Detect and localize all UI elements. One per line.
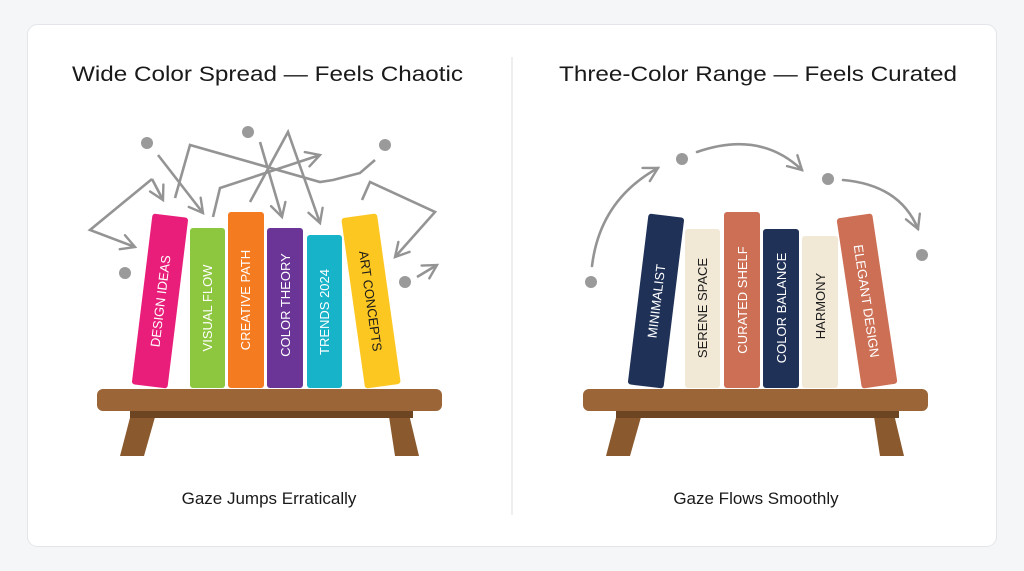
book: Creative Path: CREATIVE PATH xyxy=(238,250,253,350)
book: Art Concepts xyxy=(341,213,401,389)
book: Design Ideas xyxy=(132,213,188,389)
book: Minimalist: MINIMALIST xyxy=(645,263,668,339)
book: Creative Path xyxy=(228,212,264,388)
panel: chaotic shelf xyxy=(90,126,442,456)
title: right: Three-Color Range — Feels Curated xyxy=(559,63,957,86)
book: Harmony xyxy=(802,236,838,388)
book: Harmony: HARMONY xyxy=(813,272,828,339)
caption: right: Gaze Flows Smoothly xyxy=(673,489,839,508)
book: Curated Shelf xyxy=(724,212,760,388)
book: Visual Flow xyxy=(190,228,225,388)
book: Trends 2024: TRENDS 2024 xyxy=(317,269,332,355)
book: Elegant Design xyxy=(836,213,898,389)
book: Curated Shelf: CURATED SHELF xyxy=(735,246,750,354)
arrows: erratic gaze xyxy=(90,126,437,288)
book: Visual Flow: VISUAL FLOW xyxy=(200,264,215,351)
book: Art Concepts: ART CONCEPTS xyxy=(356,250,385,353)
arrows: smooth gaze xyxy=(585,144,928,288)
title: left: Wide Color Spread — Feels Chaotic xyxy=(72,63,463,86)
shelf: left xyxy=(97,389,442,456)
book: Trends 2024 xyxy=(307,235,342,388)
book: Serene Space xyxy=(685,229,720,388)
book: Color Balance: COLOR BALANCE xyxy=(774,252,789,363)
book: Color Theory: COLOR THEORY xyxy=(278,253,293,357)
book: Color Theory xyxy=(267,228,303,388)
book: Elegant Design: ELEGANT DESIGN xyxy=(851,244,882,359)
book: Color Balance xyxy=(763,229,799,388)
book: Minimalist xyxy=(628,213,684,389)
shelf: right xyxy=(583,389,928,456)
book: Design Ideas: DESIGN IDEAS xyxy=(147,254,174,348)
caption: left: Gaze Jumps Erratically xyxy=(182,489,357,508)
book: Serene Space: SERENE SPACE xyxy=(695,258,710,358)
panel: curated shelf xyxy=(583,144,928,456)
